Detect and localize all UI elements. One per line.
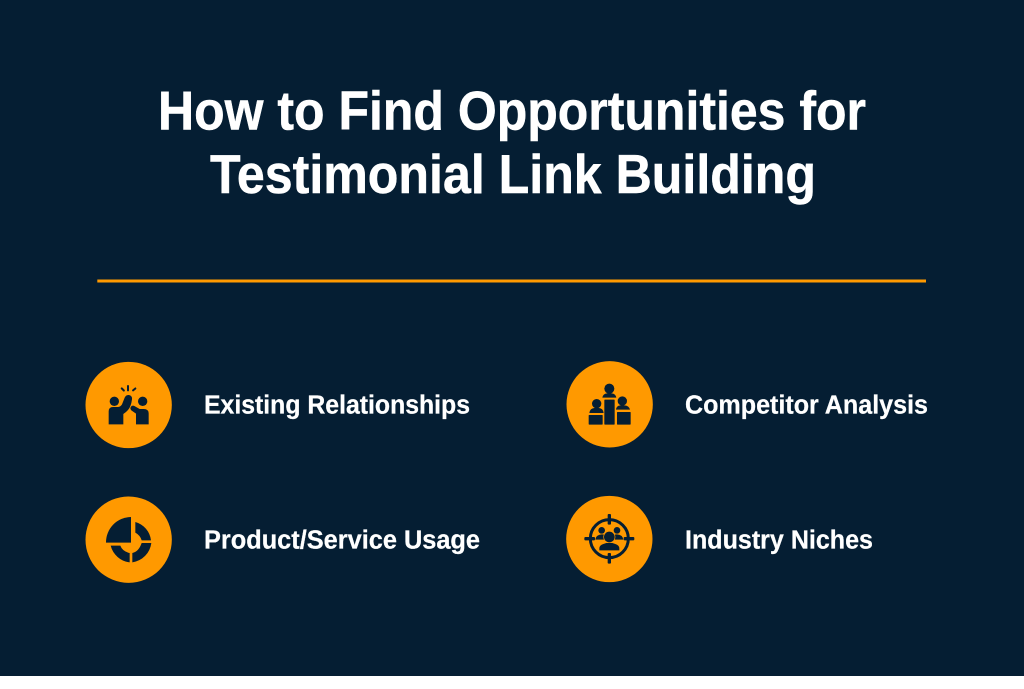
item: industry niches [566,496,873,582]
label: Industry Niches [685,526,873,554]
label: Competitor Analysis [685,391,928,419]
item: competitor analysis [566,361,928,447]
icon: audience target [566,496,652,582]
label: Existing Relationships [204,391,470,419]
title [158,80,866,205]
icon: segmented pie chart [85,496,172,583]
title: Testimonial Link Building [210,144,816,205]
icon: high five [85,362,172,448]
item: product/service usage [85,496,480,583]
title: How to Find Opportunities for [158,80,866,142]
item: existing relationships [85,362,470,448]
label: Product/Service Usage [204,526,480,554]
icon: people on podium [566,361,653,447]
